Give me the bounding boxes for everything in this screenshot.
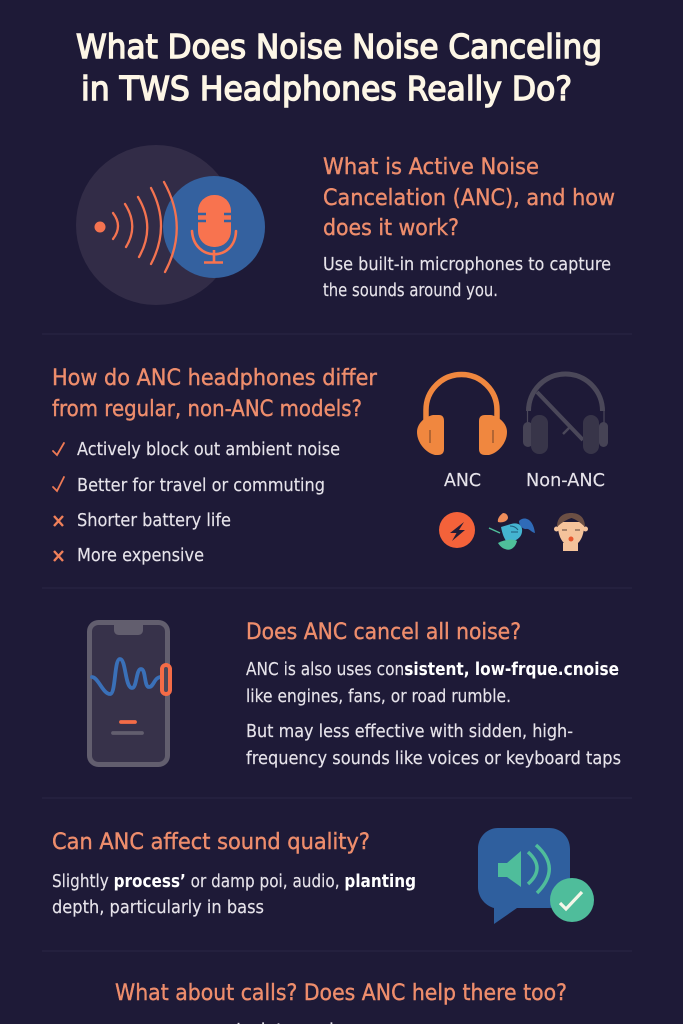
pros and cons list: Better for travel or commuting xyxy=(77,476,325,496)
pros and cons list: Shorter battery life xyxy=(77,511,231,531)
text block: ANC is also uses consistent, low-frque.cnoise xyxy=(246,660,619,680)
icon: non-ANC headphones crossed out xyxy=(523,374,608,454)
panel: does ANC cancel all noise xyxy=(90,620,621,769)
label: ANC: ANC xyxy=(444,471,481,491)
heading: from regular, non-ANC models? xyxy=(52,397,362,422)
icon: phone with waveform xyxy=(90,622,170,764)
label: Non-ANC: Non-ANC xyxy=(526,471,605,491)
heading: What is Active Noise xyxy=(323,155,539,180)
pros and cons list: Actively block out ambient noise xyxy=(77,440,340,460)
text block: like engines, fans, or road rumble. xyxy=(246,687,511,707)
pros and cons list xyxy=(53,440,340,566)
text block: the sounds around you. xyxy=(323,281,498,301)
heading: does it work? xyxy=(323,216,459,241)
panel: ANC vs non-ANC xyxy=(52,366,608,566)
heading: Cancelation (ANC), and how xyxy=(323,186,615,211)
text block: But may less effective with sidden, high- xyxy=(246,722,573,742)
heading: What about calls? Does ANC help there too? xyxy=(115,981,567,1006)
text block: frequency sounds like voices or keyboard taps xyxy=(246,749,621,769)
heading: Does ANC cancel all noise? xyxy=(246,620,521,645)
heading: Can ANC affect sound quality? xyxy=(52,830,370,855)
pros and cons list: More expensive xyxy=(77,546,204,566)
icon: lightning badge xyxy=(439,512,475,548)
text block xyxy=(323,255,611,301)
heading xyxy=(52,366,378,422)
icon: sound waves reaching microphone xyxy=(76,145,265,305)
title: What Does Noise Noise Canceling xyxy=(76,27,602,66)
icon: colourful hand xyxy=(489,513,535,550)
text block xyxy=(52,872,416,918)
panel: what is ANC xyxy=(76,145,615,305)
title: in TWS Headphones Really Do? xyxy=(81,69,572,108)
title xyxy=(76,27,602,108)
panel: sound quality xyxy=(52,828,594,924)
text block: Slightly process’ or damp poi, audio, planting xyxy=(52,872,416,892)
heading xyxy=(323,155,615,241)
icon: ANC headphones xyxy=(417,374,507,455)
icon: face with open mouth xyxy=(554,513,588,551)
text block xyxy=(246,660,621,769)
text block: Use built-in microphones to capture xyxy=(323,255,611,275)
icon: speech bubble with speaker and check xyxy=(478,828,594,924)
panel: calls xyxy=(115,981,567,1024)
heading: How do ANC headphones differ xyxy=(52,366,378,391)
text block: depth, particularly in bass xyxy=(52,898,264,918)
